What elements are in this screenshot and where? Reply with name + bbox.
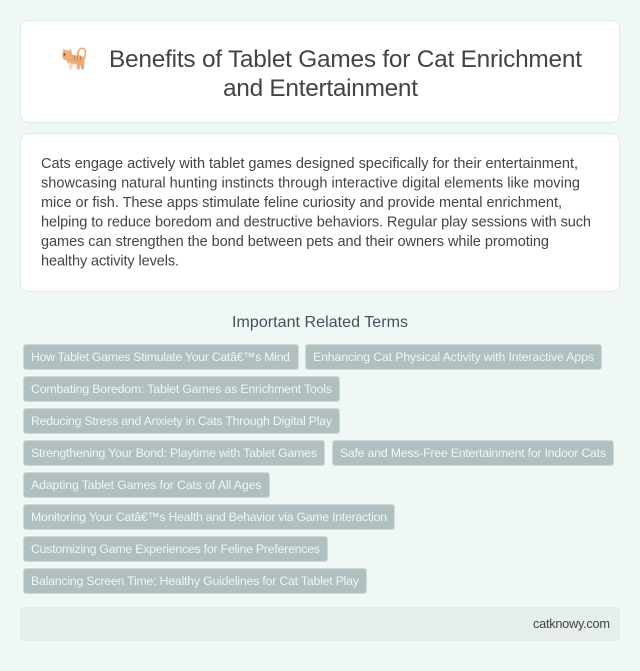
description text: showcasing natural hunting instincts through interactive digital elements like moving xyxy=(41,176,580,192)
tag: physical activity: Enhancing Cat Physical Activity with Interactive Apps xyxy=(313,350,594,364)
tag: strengthening bond: Strengthening Your Bond: Playtime with Tablet Games xyxy=(31,446,317,460)
tag: physical activity xyxy=(306,344,602,370)
description text: mice or fish. These apps stimulate feline curiosity and provide mental enrichment, xyxy=(41,195,562,211)
tag: combating boredom xyxy=(24,376,340,402)
description text: helping to reduce boredom and destructive behaviors. Regular play sessions with such xyxy=(41,214,591,230)
tag: screen time: Balancing Screen Time: Healthy Guidelines for Cat Tablet Play xyxy=(31,574,360,588)
panel: title header xyxy=(20,20,620,122)
title text: Benefits of Tablet Games for Cat Enrichment xyxy=(109,46,582,73)
tag: reducing stress xyxy=(24,408,340,434)
tag: reducing stress: Reducing Stress and Anxiety in Cats Through Digital Play xyxy=(31,414,333,428)
tag: monitoring health xyxy=(24,504,394,530)
heading: related terms: Important Related Terms xyxy=(232,314,408,331)
panel: description xyxy=(20,134,620,292)
icon: cat xyxy=(62,48,85,70)
tag: customizing: Customizing Game Experiences for Feline Preferences xyxy=(31,542,320,556)
tag: stimulate mind xyxy=(24,344,298,370)
tag: safe entertainment: Safe and Mess-Free Entertainment for Indoor Cats xyxy=(340,446,606,460)
tag: all ages: Adapting Tablet Games for Cats of All Ages xyxy=(31,478,262,492)
title text: and Entertainment xyxy=(223,75,418,102)
description text: games can strengthen the bond between pets and their owners while promoting xyxy=(41,234,549,250)
tag: strengthening bond xyxy=(24,440,324,466)
tag: screen time xyxy=(24,568,366,594)
description text: healthy activity levels. xyxy=(41,254,179,270)
tag: safe entertainment xyxy=(332,440,614,466)
tag: customizing xyxy=(24,536,328,562)
tag: all ages xyxy=(24,472,270,498)
tag list xyxy=(24,344,614,594)
description text: Cats engage actively with tablet games designed specifically for their entertainment, xyxy=(41,156,578,172)
tag: stimulate mind: How Tablet Games Stimulate Your Catâ€™s Mind xyxy=(31,350,290,364)
title text xyxy=(109,46,582,102)
footer bar xyxy=(20,607,620,641)
tag: combating boredom: Combating Boredom: Tablet Games as Enrichment Tools xyxy=(31,382,332,396)
tag: monitoring health: Monitoring Your Catâ€™s Health and Behavior via Game Interaction xyxy=(31,510,387,524)
footer site name: catknowy.com xyxy=(533,616,610,631)
description text xyxy=(41,156,591,270)
